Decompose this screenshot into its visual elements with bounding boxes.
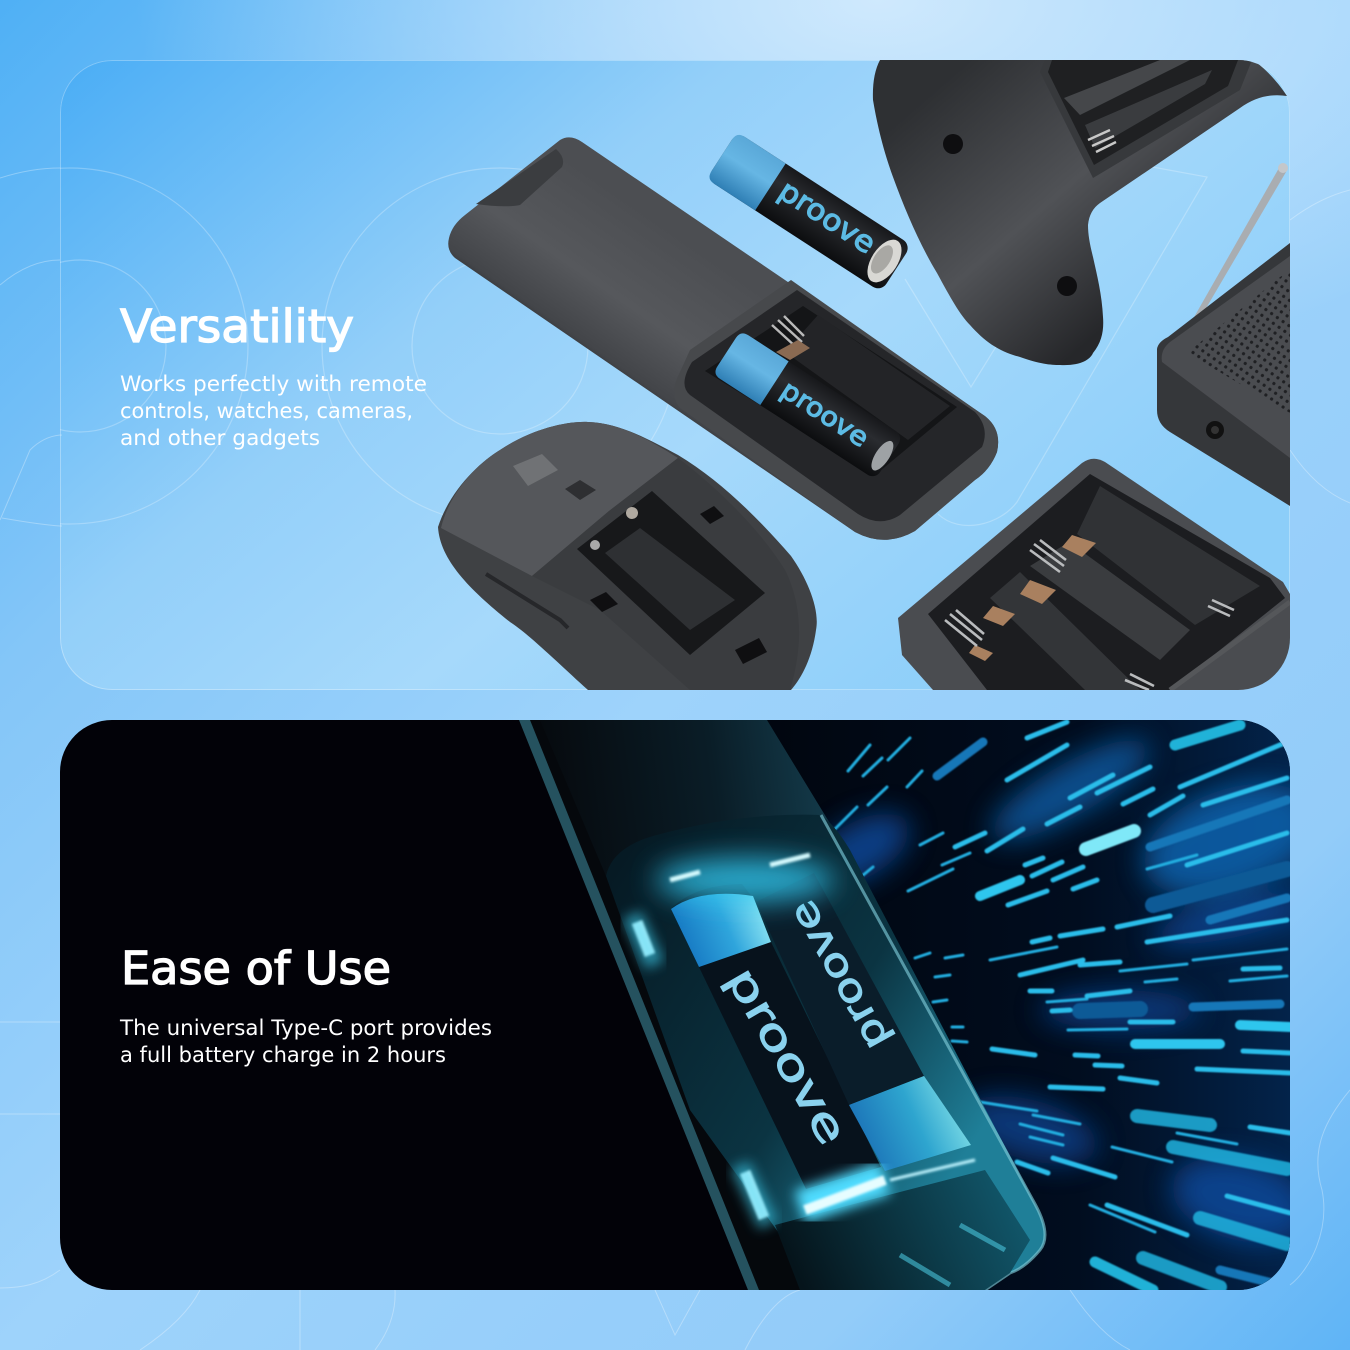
remote with transparent shell — [519, 720, 1045, 1290]
battery glow contacts — [632, 855, 975, 1225]
remote control — [448, 137, 998, 540]
battery standalone: proove — [773, 173, 882, 260]
panel: ease of use — [60, 720, 1332, 1290]
battery compartment — [674, 280, 998, 540]
game controller — [873, 60, 1287, 365]
light streaks — [833, 722, 1290, 1290]
heading: Versatility: Versatility — [120, 300, 354, 353]
text block: ease of use description: a full battery charge in 2 hours — [120, 1043, 446, 1067]
battery holder box — [898, 459, 1290, 690]
battery inside remote: proove — [775, 375, 874, 454]
battery inside remote — [712, 330, 904, 480]
blue haze behind streaks — [826, 724, 1290, 1258]
text block: ease of use description: The universal Type-C port provides — [119, 1016, 492, 1040]
battery left with logo — [671, 884, 881, 1189]
computer mouse — [438, 422, 817, 690]
heading: Ease of Use: Ease of Use — [121, 942, 391, 995]
text block: ease of use description — [119, 1016, 492, 1067]
battery standalone — [707, 132, 911, 292]
text block: versatility description: and other gadgets — [120, 426, 320, 450]
battery right with logo — [756, 873, 971, 1171]
text block: versatility description: Works perfectly with remote — [120, 372, 427, 396]
panel: versatility — [0, 60, 1290, 690]
battery right with logo: proove — [780, 893, 898, 1058]
radio — [1157, 163, 1290, 506]
text block: versatility description: controls, watches, cameras, — [120, 399, 413, 423]
battery left with logo: proove — [717, 959, 857, 1153]
text block: versatility description — [120, 372, 427, 450]
